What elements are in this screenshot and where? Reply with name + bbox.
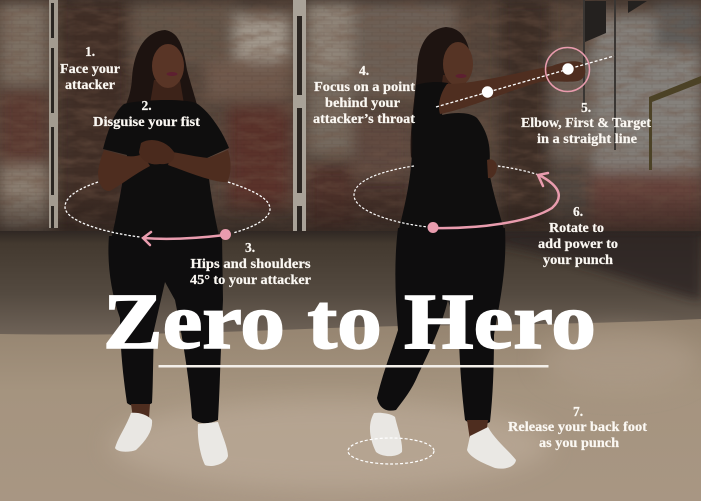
dashed alignment line: [436, 56, 614, 107]
step 6: 6.: [573, 204, 583, 219]
fist dot: [562, 63, 574, 75]
right wall windows and frame: [583, 0, 701, 170]
brick wall patches: [0, 0, 701, 232]
trousers: [108, 236, 223, 423]
steel column left: [49, 0, 58, 228]
dashed orbit right: [228, 182, 270, 233]
figure: punching woman: [370, 27, 585, 469]
dashed orbit upper right: [498, 166, 539, 175]
step 1: [60, 44, 120, 92]
diagram: left hip rotation: [65, 182, 270, 245]
rear hand: [487, 159, 497, 178]
pink rotation arrow: [433, 173, 559, 228]
steel column centre: [293, 0, 306, 234]
step 1: Face your: [60, 61, 120, 76]
lips: [166, 72, 178, 76]
wall grain: [0, 0, 701, 232]
step 6: Rotate to: [549, 220, 604, 235]
right shoe: [198, 422, 228, 466]
step 6: [538, 204, 618, 267]
diagram: back foot ellipse: [348, 438, 434, 464]
neck: [440, 75, 468, 100]
right ankle: [467, 420, 488, 440]
step 3: Hips and shoulders: [190, 256, 310, 271]
step 4: attacker’s throat: [313, 111, 416, 126]
diagram: punch alignment: [436, 48, 614, 107]
step 4: behind your: [325, 95, 400, 110]
step 5: 5.: [581, 100, 591, 115]
step 7: [508, 404, 648, 450]
title underline: [158, 365, 548, 368]
brick texture: [0, 0, 701, 232]
face: [443, 42, 473, 86]
shirt: [398, 82, 505, 233]
step 7: as you punch: [539, 435, 620, 450]
figure: guard stance woman: [98, 30, 231, 466]
step 5: Elbow, First & Target: [521, 115, 652, 130]
step 3: 45° to your attacker: [190, 272, 311, 287]
right shoe: [467, 427, 516, 469]
hair: [120, 30, 205, 138]
target ring: [546, 48, 590, 92]
step 1: attacker: [65, 77, 115, 92]
dashed orbit left: [65, 182, 140, 237]
step 5: [521, 100, 652, 146]
wall shading: [0, 0, 701, 232]
step 6: your punch: [543, 252, 614, 267]
pink dot: [220, 229, 231, 240]
step 4: [313, 63, 416, 126]
floor: [0, 231, 701, 501]
step 2: Disguise your fist: [93, 114, 201, 129]
title: Zero to Hero: [103, 279, 596, 366]
elbow dot: [482, 86, 493, 98]
trousers: [377, 228, 505, 425]
step 7: 7.: [573, 404, 583, 419]
left shoe: [370, 413, 402, 456]
arms: [98, 150, 231, 191]
extended arm: [439, 61, 585, 114]
pink rotation arrow: [143, 232, 225, 245]
step 1: 1.: [85, 44, 95, 59]
lips: [456, 74, 466, 78]
step 7: Release your back foot: [508, 419, 648, 434]
left ankle: [131, 404, 150, 418]
step 5: in a straight line: [537, 131, 637, 146]
dashed orbit: [354, 166, 428, 227]
step 6: add power to: [538, 236, 618, 251]
step 4: 4.: [359, 63, 369, 78]
step 4: Focus on a point: [314, 79, 416, 94]
face: [152, 44, 184, 88]
step 2: 2.: [141, 98, 152, 113]
step 2: [93, 98, 201, 129]
hands: [139, 140, 174, 164]
diagram: right hip rotation: [354, 166, 559, 233]
pink dot: [428, 222, 438, 233]
shirt: [103, 100, 229, 240]
left shoe: [115, 413, 152, 452]
step 3: 3.: [245, 240, 255, 255]
step 3: [190, 240, 311, 287]
neck: [150, 80, 184, 104]
hair: [411, 27, 470, 158]
